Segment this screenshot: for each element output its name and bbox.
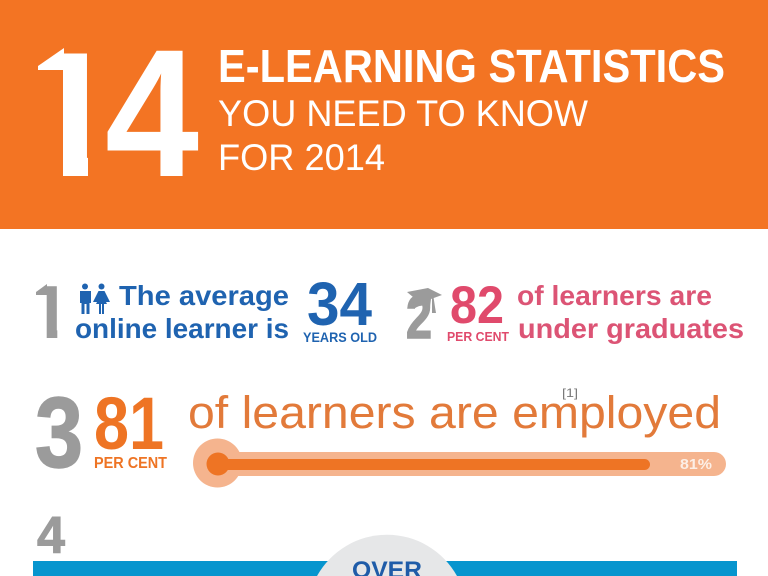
title: big number 14 bbox=[14, 11, 199, 215]
panel: statistic 4 bbox=[33, 507, 737, 576]
subtitle: for 2014: FOR 2014 bbox=[218, 137, 385, 178]
panel: statistic 1 average learner age bbox=[24, 270, 377, 354]
text: the average online learner is: The average bbox=[119, 280, 289, 311]
panel: statistic 3 employed bbox=[35, 377, 726, 489]
grey circle bbox=[317, 535, 457, 576]
number 81: 81 bbox=[94, 382, 164, 465]
number 2: 2 bbox=[406, 284, 432, 351]
text: of learners are under graduates bbox=[517, 280, 744, 344]
text: of learners are under graduates: of learners are bbox=[517, 280, 712, 311]
label: per cent: PER CENT bbox=[94, 455, 167, 472]
progress value: 81% bbox=[680, 456, 712, 473]
footnote marker: [1] bbox=[562, 386, 578, 400]
subtitle: you need to know: YOU NEED TO KNOW bbox=[218, 93, 588, 134]
progress bar 81% bbox=[193, 438, 726, 488]
blue band bbox=[33, 561, 737, 576]
title: big number 14: 4 bbox=[105, 11, 199, 215]
panel: statistic 2 under graduates bbox=[406, 276, 744, 351]
panel: orange header bbox=[0, 0, 768, 229]
icon: man and woman bbox=[80, 284, 110, 314]
number 82: 82 bbox=[450, 276, 504, 335]
title: big number 14: 1 bbox=[21, 15, 120, 214]
title: E-Learning Statistics: E-LEARNING STATISTICS bbox=[218, 40, 725, 92]
text: the average online learner is: online learner is bbox=[75, 313, 289, 344]
text: the average online learner is bbox=[75, 280, 289, 344]
number 4: 4 bbox=[37, 507, 65, 565]
number 3: 3 bbox=[35, 377, 83, 489]
label: per cent: PER CENT bbox=[447, 329, 509, 344]
number 1: 1 bbox=[29, 270, 71, 354]
text: of learners are employed: of learners are employed bbox=[188, 387, 721, 438]
text: of learners are under graduates: under graduates bbox=[518, 313, 744, 344]
label: years old: YEARS OLD bbox=[303, 329, 377, 345]
icon: graduation cap bbox=[407, 288, 442, 313]
number 34: 34 bbox=[307, 270, 372, 338]
